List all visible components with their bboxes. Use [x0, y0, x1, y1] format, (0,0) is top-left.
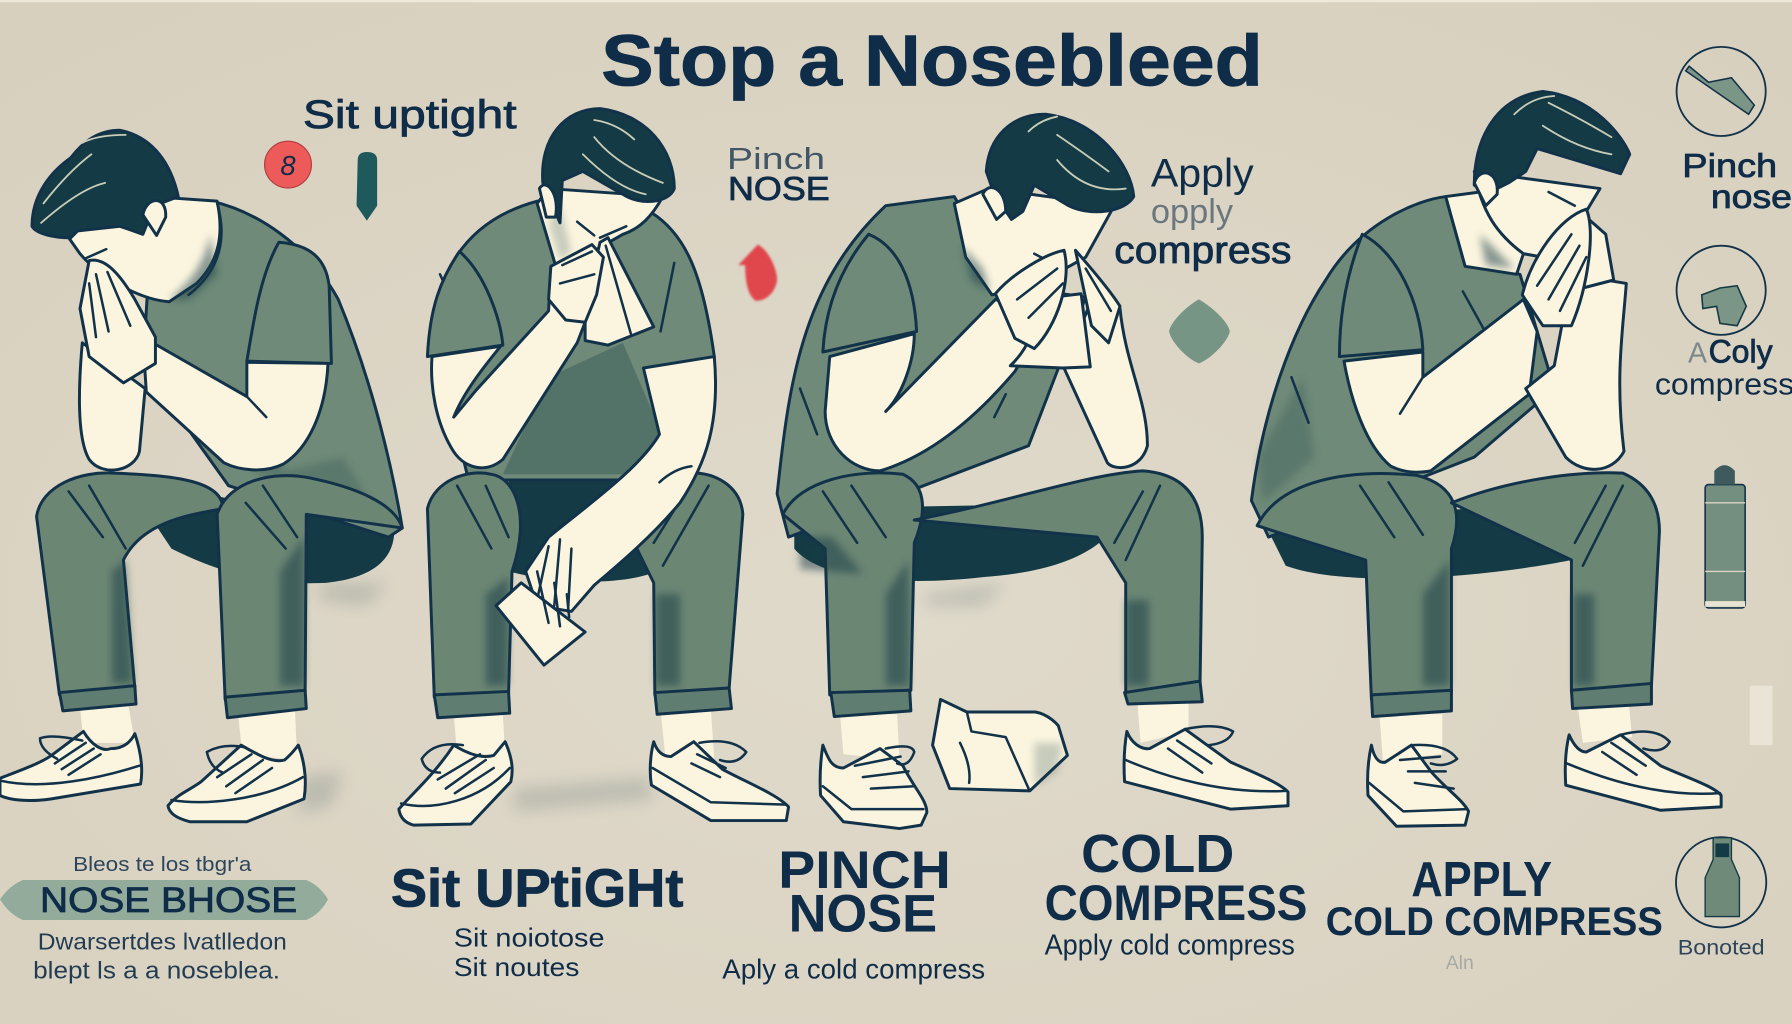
label: A Coly compress: A	[1688, 337, 1707, 369]
figure 3 cloth	[1010, 294, 1090, 368]
figure 2 left leg	[427, 473, 520, 697]
caption panel 4: cold compress: Apply cold compress	[1045, 929, 1295, 961]
figure 1 neck shadow	[169, 234, 217, 299]
figure 2 seat shadow	[509, 474, 657, 582]
figure 3 sleeve and upper shirt	[823, 234, 917, 352]
caption panel 3: pinch nose: Aply a cold compress	[722, 953, 985, 984]
label: Pinch nose (right): nose	[1711, 179, 1792, 216]
figure 4 right forearm	[1526, 274, 1626, 469]
figure 2 ear	[539, 185, 556, 217]
figure 3: man pressing cloth to nose	[777, 114, 1288, 829]
label: Pinch nose (upper): NOSE	[728, 171, 830, 208]
figure 1 sleeve	[247, 242, 331, 363]
caption panel 2: sit uptight: Sit noutes	[454, 952, 579, 982]
figure 4 tissue	[1566, 217, 1614, 288]
label: Apply compress: Apply	[1151, 151, 1254, 195]
figure 4 face	[1474, 171, 1600, 257]
icon: pinch circle	[1677, 47, 1766, 136]
figure 1 right leg	[217, 476, 402, 699]
figure 2 raised arm	[432, 261, 597, 468]
figure 1 shirt	[143, 201, 402, 537]
caption panel 4: cold compress: COLD	[1081, 824, 1234, 884]
figure 2 hand	[549, 245, 603, 322]
caption panel 2: sit uptight: Sit UPtiGHt	[391, 858, 684, 918]
figure 2: man holding tissue to nose	[399, 109, 789, 825]
label: Apply compress: compress	[1114, 229, 1291, 271]
icon: red up arrow	[738, 245, 777, 301]
figure 4 hair	[1474, 91, 1630, 194]
figure 1 left leg	[37, 473, 223, 695]
label: Apply compress	[1114, 151, 1291, 271]
title: Stop a Nosebleed	[601, 22, 1263, 102]
caption panel 5: apply cold compress	[1326, 853, 1663, 944]
figure 3 hands	[995, 250, 1066, 349]
figure 4 shirt	[1251, 197, 1554, 537]
figure 4 hands	[1522, 209, 1590, 326]
caption panel 4: cold compress: COMPRESS	[1045, 874, 1307, 931]
icon: spray bottle circle	[1676, 837, 1766, 927]
figure 4 right leg	[1451, 473, 1659, 691]
caption panel 1: nose bhose: blept ls a a noseblea.	[33, 957, 280, 984]
figure 3 left arm	[825, 299, 1046, 471]
faint panel mark	[1750, 686, 1773, 745]
caption panel 4: cold compress	[1045, 824, 1307, 961]
caption panel 2: sit uptight: Sit noiotose	[454, 922, 605, 952]
figure 4 socks	[1379, 699, 1632, 760]
figure 3 left shoe	[820, 745, 927, 829]
figure 3 shirt	[777, 197, 1086, 537]
figure 1 cuffs	[59, 686, 306, 718]
figure 2 hair	[543, 109, 674, 223]
figure 2 right shoe	[650, 741, 789, 821]
figure 4 left arm	[1344, 299, 1537, 472]
figure 3 cuffs	[831, 681, 1202, 717]
figure 1 left forearm	[79, 343, 145, 470]
floor shadows	[299, 583, 1006, 814]
icon: water bottle	[1705, 465, 1745, 608]
figure 4 sleeve	[1339, 234, 1423, 357]
figure 2 cuffs	[434, 688, 731, 718]
caption panel 1: nose bhose: Dwarsertdes lvatlledon	[38, 929, 287, 955]
figure 3 face and neck	[954, 189, 1114, 295]
figure 4 right shoe	[1565, 732, 1721, 810]
figure 3 right leg	[914, 471, 1202, 695]
figure 2 shirt	[434, 201, 714, 480]
label: Apply compress: opply	[1151, 193, 1234, 231]
figure 2 lowered arm	[526, 357, 716, 611]
caption panel 5: apply cold compress: COLD COMPRESS	[1326, 900, 1663, 944]
caption panel 3: pinch nose: NOSE	[789, 884, 937, 943]
figure 3 ear	[983, 188, 1006, 219]
figure 1 ear	[143, 201, 166, 235]
icon: green blob	[1169, 299, 1230, 363]
figure 4: man with both hands at nose	[1251, 91, 1721, 826]
figure 1 seat shadow	[126, 480, 394, 583]
icon: red number badge	[265, 141, 311, 188]
figure 3 socks	[840, 697, 1189, 760]
figure 1 hair	[32, 130, 178, 238]
figure 2 face and neck	[537, 189, 663, 265]
figure 2 right leg	[617, 473, 743, 695]
caption panel 3: pinch nose	[722, 841, 985, 984]
pill banner	[0, 880, 328, 920]
figure 2 low tissue	[496, 583, 585, 665]
figure 4 cuffs	[1371, 683, 1651, 717]
figure 1 socks	[80, 703, 297, 760]
caption panel 1: nose bhose: Bleos te los tbgr'a	[73, 853, 252, 876]
figure 1 face and neck	[66, 197, 220, 302]
figure 4 ear	[1474, 173, 1497, 206]
label: Sit uptight: Sit uptight	[303, 93, 517, 137]
figure 3 hair	[986, 114, 1134, 219]
figure 1 right shoe	[168, 745, 305, 822]
caption panel 3: pinch nose: PINCH	[778, 841, 951, 900]
label: A Coly compress	[1655, 333, 1792, 401]
figure 1 hands	[80, 260, 155, 383]
icon: red number badge: 8	[280, 150, 296, 181]
label: Pinch nose (upper): Pinch	[727, 141, 825, 176]
figure 1 left shoe	[0, 731, 142, 801]
label: A Coly compress: Coly	[1709, 333, 1773, 369]
faint label remnant: Aln	[1446, 952, 1474, 974]
label: Pinch nose (right)	[1682, 148, 1792, 216]
icon: compress circle	[1677, 246, 1766, 335]
caption panel 1: nose bhose	[0, 853, 328, 984]
figure 3 left leg	[783, 473, 923, 695]
label: A Coly compress: compress	[1655, 366, 1792, 401]
figure 4 seat shadow	[1263, 503, 1577, 579]
figure 3 right forearm	[1064, 309, 1147, 468]
figure 2 left sleeve	[427, 251, 503, 357]
label: Bonoted: Bonoted	[1678, 934, 1765, 959]
figure 2 socks	[454, 709, 714, 760]
caption panel 2: sit uptight	[391, 858, 684, 982]
figure 2 left shoe	[399, 742, 512, 825]
figure 1: man leaning forward holding nose	[0, 130, 402, 822]
figure 3 seat shadow	[794, 503, 1126, 581]
figure 4 neck	[1446, 192, 1523, 274]
caption panel 1: nose bhose: NOSE BHOSE	[40, 880, 297, 920]
figure 3 wadded compress	[933, 699, 1067, 791]
figure 4 left leg	[1257, 474, 1457, 699]
figure 3 right shoe	[1124, 726, 1288, 809]
label: Pinch nose (upper)	[727, 141, 830, 208]
caption panel 5: apply cold compress: APPLY	[1411, 853, 1552, 907]
label: Pinch nose (right): Pinch	[1682, 148, 1777, 185]
icon: teal marker arrow	[357, 152, 377, 221]
figure 4 left shoe	[1368, 745, 1469, 826]
figure 1 right arm	[143, 337, 328, 470]
figure 2 face tissue	[585, 238, 654, 345]
